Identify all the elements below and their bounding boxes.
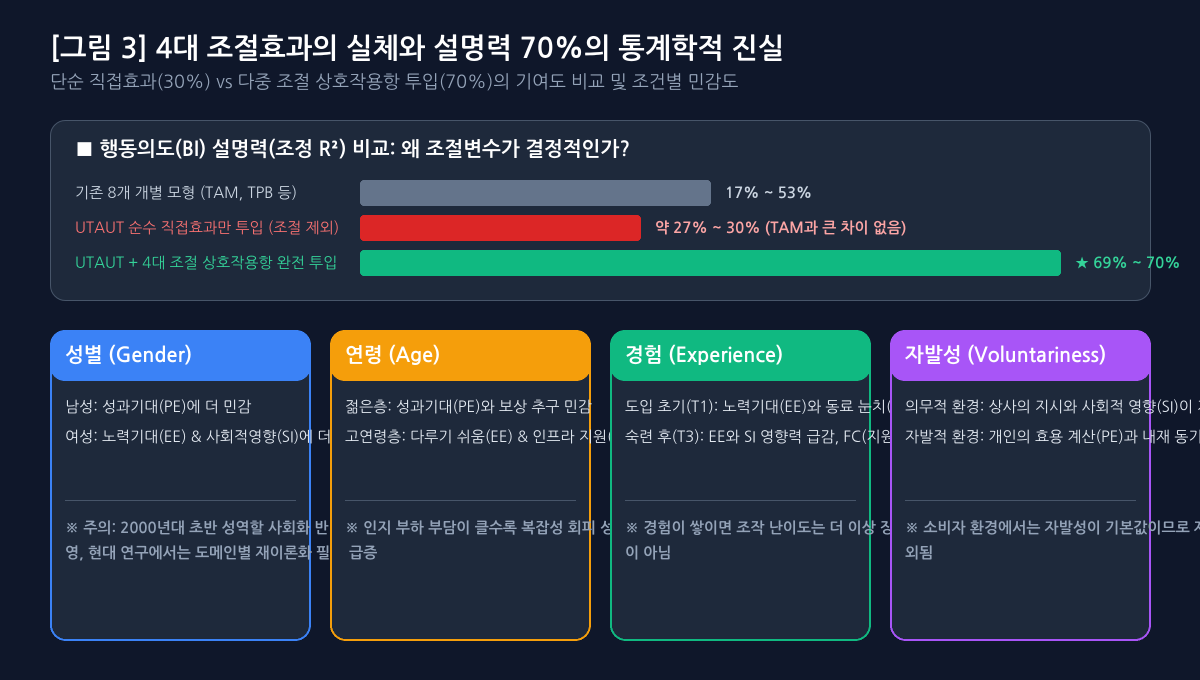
card body: experience [625,399,941,445]
subtitle: 단순 직접효과(30%) vs 다중 조절 상호작용항 투입(70%)의 기여도 비교 및 조건별 민감도 [50,72,738,91]
card note: gender: 영, 현대 연구에서는 도메인별 재이론화 필요 [65,545,344,561]
card note: experience: ※ 경험이 쌓이면 조작 난이도는 더 이상 장벽 [625,520,908,536]
row: with four moderators [75,250,1181,276]
row: individual models: 17% ~ 53% [725,186,812,201]
card: voluntariness [890,330,1200,640]
card header: gender: 성별 (Gender) [65,344,192,365]
card note: voluntariness: ※ 소비자 환경에서는 자발성이 기본값이므로 제 [905,520,1200,536]
row: individual models: 기존 8개 개별 모형 (TAM, TPB 등) [75,185,297,201]
card: age [330,330,669,640]
card body: gender: 남성: 성과기대(PE)에 더 민감 [65,399,252,415]
card header: age [330,330,591,381]
card header: voluntariness [890,330,1151,381]
card header: experience [610,330,871,381]
row: direct effects only: 약 27% ~ 30% (TAM과 큰 차이 없음) [655,219,906,236]
card note: voluntariness [905,520,1200,561]
card body: gender [65,399,365,445]
title: [그림 3] 4대 조절효과의 실체와 설명력 70%의 통계학적 진실 [50,34,784,63]
row: with four moderators: ★ 69% ~ 70% [1075,256,1181,271]
card body: age: 고연령층: 다루기 쉬움(EE) & 인프라 지원(FC) 민감 [345,429,669,445]
card header: age: 연령 (Age) [345,344,440,365]
row: direct effects only [75,215,906,241]
row: with four moderators: UTAUT + 4대 조절 상호작용항 완전 투입 [75,255,337,271]
card note: experience: 이 아님 [625,545,672,561]
card body: age [345,399,669,445]
card note: age [345,520,628,561]
row: direct effects only: UTAUT 순수 직접효과만 투입 (조절 제외) [75,220,339,236]
card body: voluntariness [905,399,1200,445]
card body: experience: 도입 초기(T1): 노력기대(EE)와 동료 눈치(SI) 중요 [625,399,941,415]
card: gender [50,330,365,640]
card note: experience [625,520,908,561]
card note: voluntariness: 외됨 [905,545,933,561]
card: experience [610,330,941,640]
card note: gender: ※ 주의: 2000년대 초반 성역할 사회화 반 [65,520,329,536]
card header: voluntariness: 자발성 (Voluntariness) [905,344,1106,365]
card header: gender [50,330,311,381]
card note: age: 급증 [349,545,377,561]
card note: age: ※ 인지 부하 부담이 클수록 복잡성 회피 성향 [345,520,628,536]
panel: explanatory power comparison [50,120,1181,300]
card body: experience: 숙련 후(T3): EE와 SI 영향력 급감, FC(지원) 중요 [625,429,933,445]
card body: age: 젊은층: 성과기대(PE)와 보상 추구 민감 [345,399,593,415]
row: individual models [75,180,812,206]
card note: gender [65,520,344,561]
card header: experience: 경험 (Experience) [625,344,783,365]
card body: gender: 여성: 노력기대(EE) & 사회적영향(SI)에 더 민감 [65,429,365,445]
panel heading: ■ 행동의도(BI) 설명력(조정 R²) 비교: 왜 조절변수가 결정적인가? [75,138,630,159]
